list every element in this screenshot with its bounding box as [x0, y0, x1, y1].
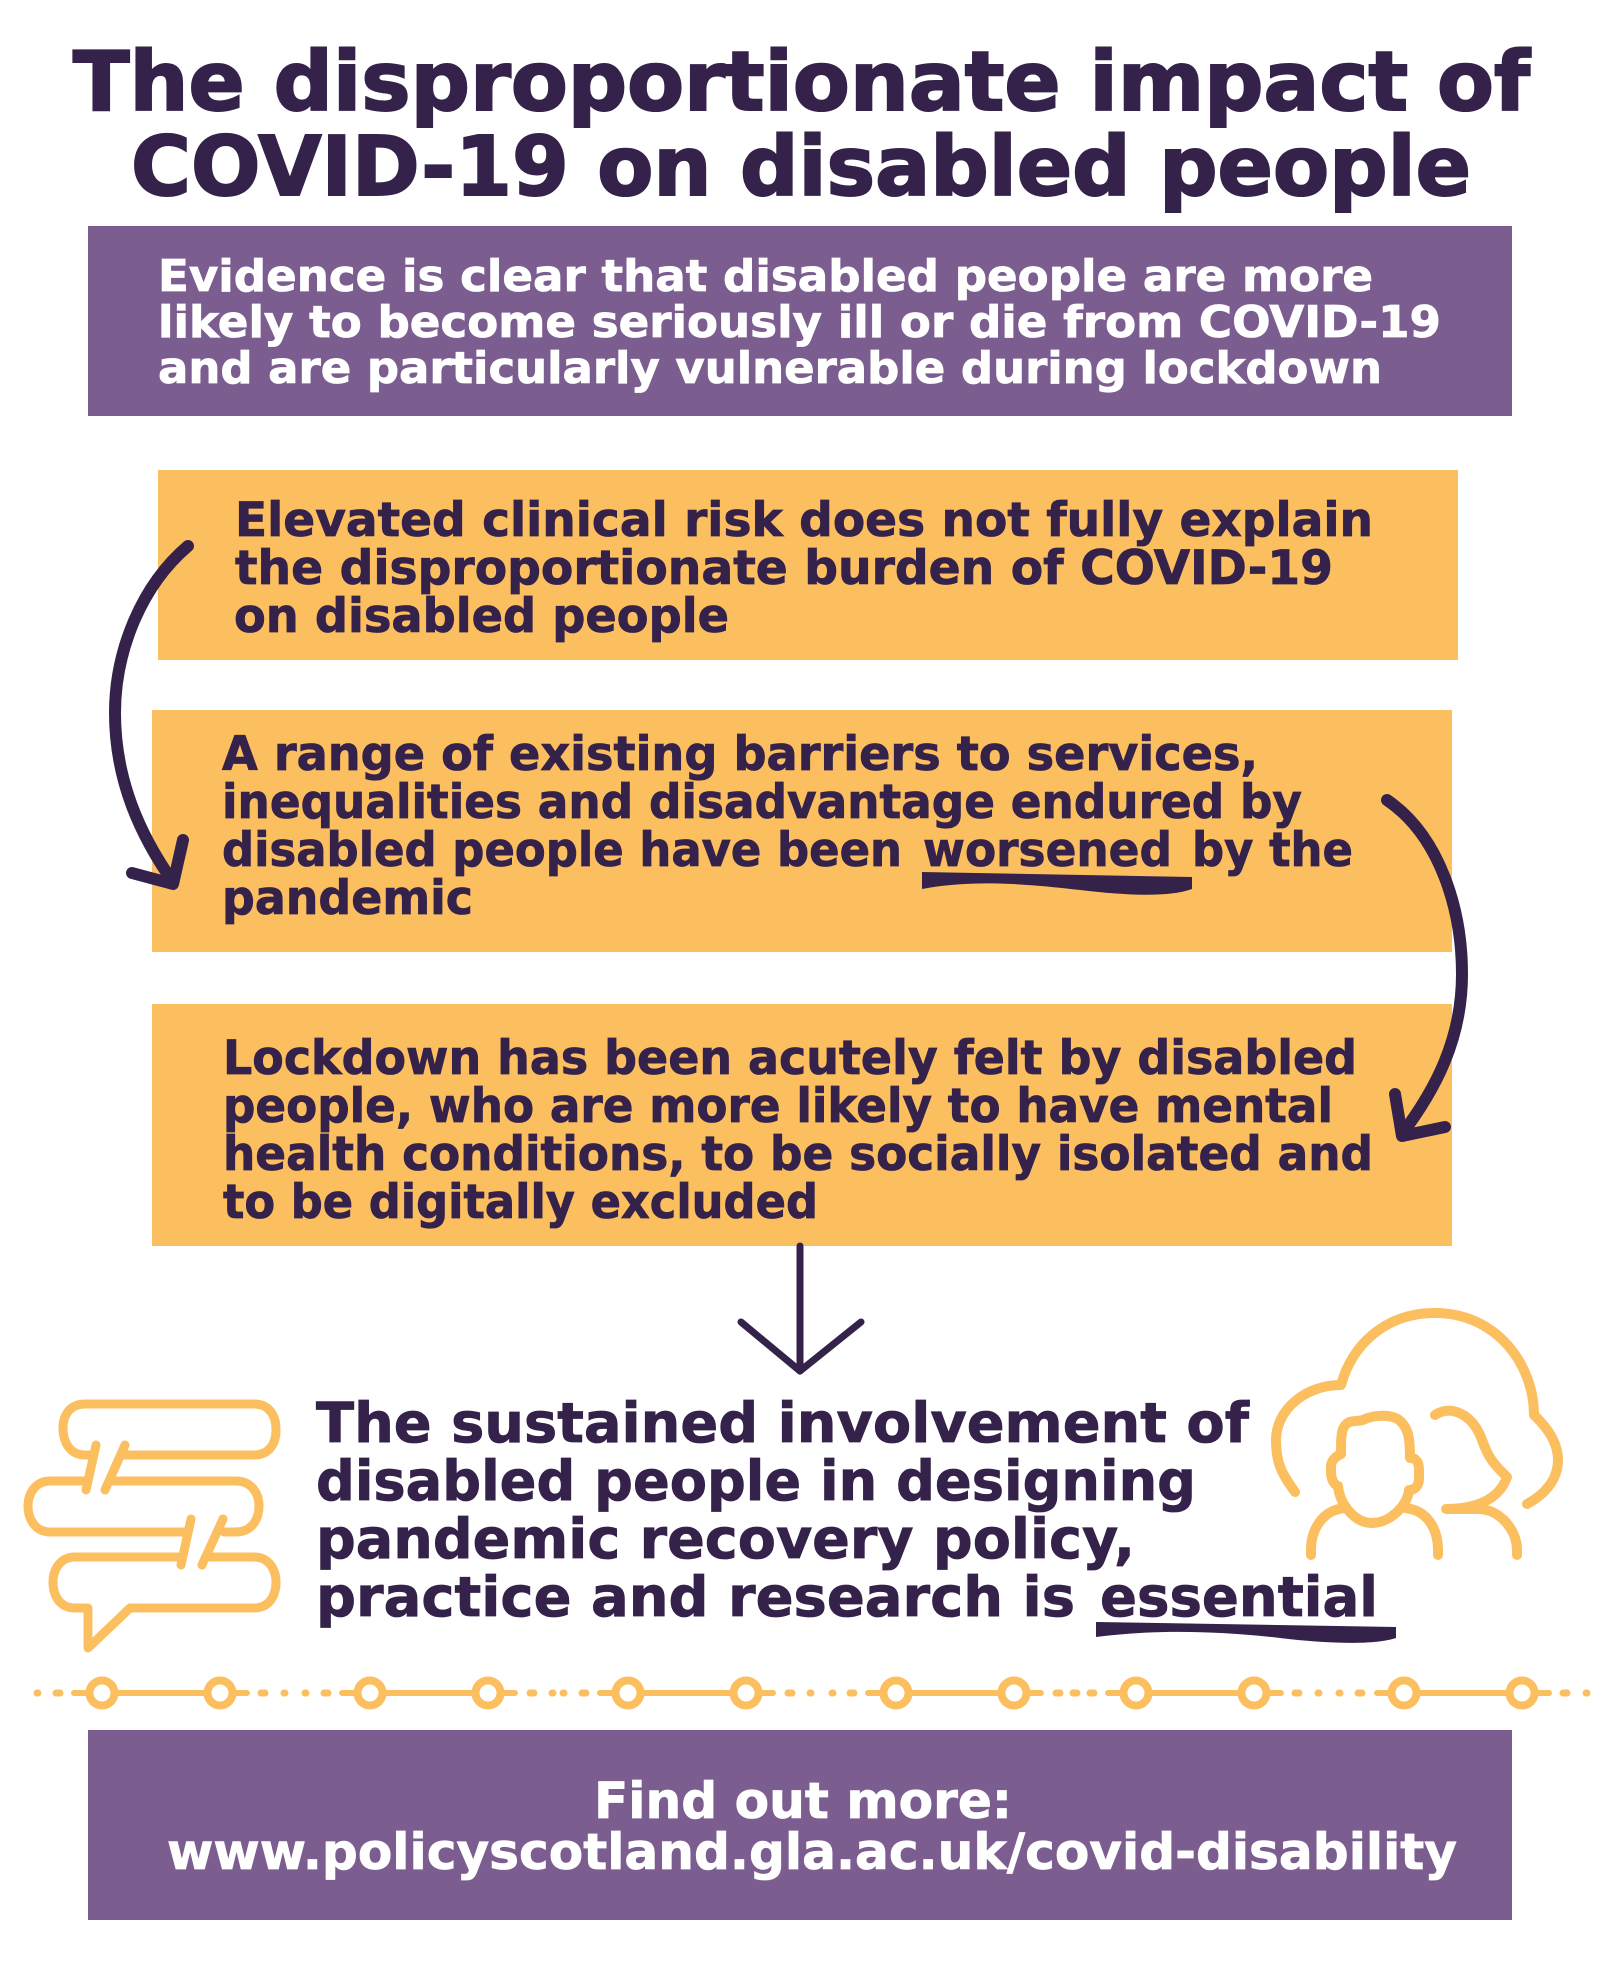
text: sustained involvement conclusion: The sustained involvement of — [316, 1391, 1250, 1455]
panel: evidence intro: and are particularly vulnerable during lockdown — [158, 343, 1382, 394]
panel: lockdown: health conditions, to be socially isolated and — [223, 1127, 1373, 1182]
text: sustained involvement conclusion: practice and research is — [316, 1565, 1075, 1629]
panel: evidence intro — [88, 226, 1512, 416]
panel: elevated clinical risk — [158, 470, 1458, 660]
panel: lockdown: people, who are more likely to have mental — [223, 1079, 1333, 1134]
panel: find out more — [88, 1730, 1512, 1920]
panel: existing barriers: pandemic — [222, 871, 473, 926]
panel: find out more: Find out more: — [594, 1772, 1012, 1830]
title: COVID-19 on disabled people — [131, 120, 1471, 215]
text: sustained involvement conclusion: essential — [1100, 1565, 1378, 1629]
panel: elevated clinical risk: the disproportionate burden of COVID-19 — [235, 541, 1333, 596]
panel: lockdown: to be digitally excluded — [223, 1175, 818, 1230]
panel: lockdown — [152, 1004, 1452, 1246]
title — [73, 35, 1531, 215]
text: sustained involvement conclusion: pandemic recovery policy, — [316, 1507, 1135, 1571]
arrow: left curved — [115, 546, 188, 884]
divider: dotted timeline — [37, 1680, 1587, 1706]
panel: evidence intro: likely to become seriously ill or die from COVID-19 — [158, 297, 1441, 348]
text: sustained involvement conclusion: disabled people in designing — [316, 1449, 1196, 1513]
icon: people in a cloud — [1276, 1313, 1558, 1555]
title: The disproportionate impact of — [73, 35, 1531, 130]
panel: existing barriers — [152, 710, 1452, 952]
arrow: straight down — [741, 1246, 861, 1371]
arrow: right curved — [1387, 800, 1462, 1136]
text: sustained involvement conclusion — [316, 1391, 1378, 1629]
underline: essential — [1096, 1622, 1396, 1643]
panel: evidence intro: Evidence is clear that disabled people are more — [158, 251, 1373, 302]
panel: lockdown: Lockdown has been acutely felt by disabled — [223, 1031, 1357, 1086]
panel: existing barriers: inequalities and disadvantage endured by — [222, 775, 1302, 830]
panel: existing barriers: worsened — [923, 823, 1172, 878]
panel: existing barriers: disabled people have been — [222, 823, 902, 878]
panel: find out more: www.policyscotland.gla.ac.uk/covid-disability — [167, 1823, 1457, 1881]
icon: speech bubbles — [28, 1404, 276, 1648]
panel: elevated clinical risk: Elevated clinical risk does not fully explain — [235, 493, 1373, 548]
panel: existing barriers: by the — [1192, 823, 1353, 878]
panel: existing barriers: A range of existing barriers to services, — [222, 727, 1258, 782]
panel: elevated clinical risk: on disabled people — [234, 589, 729, 644]
underline: worsened — [922, 872, 1192, 895]
